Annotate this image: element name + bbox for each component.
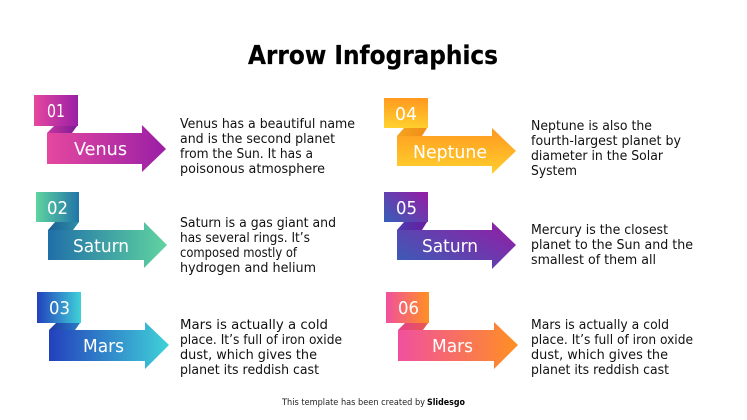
arrow: Mars — [398, 322, 518, 369]
number tab 04 — [384, 98, 428, 128]
number tab 01 — [34, 95, 78, 126]
fold 02 — [48, 222, 79, 230]
arrow: Venus — [47, 125, 166, 172]
footer credit: This template has been created by — [281, 398, 425, 408]
panel: 02 Saturn — [36, 192, 336, 276]
number tab 02 — [36, 192, 79, 222]
description: Venus: from the Sun. It has a — [180, 147, 313, 162]
number tab 01: 01 — [47, 102, 65, 122]
fold 06 — [398, 323, 428, 330]
description: Mars — [531, 318, 693, 378]
number tab 05: 05 — [396, 199, 417, 219]
arrow: Saturn: Saturn — [422, 237, 478, 257]
fold 04 — [397, 128, 427, 136]
description: Venus: and is the second planet — [180, 132, 335, 147]
arrow: Venus: Venus — [74, 140, 127, 160]
description: Mars: Mars is actually a cold — [531, 318, 669, 333]
panel: 06 Mars — [386, 292, 693, 378]
description: Mercury: Mercury is the closest — [531, 223, 668, 238]
number tab 06: 06 — [398, 299, 419, 319]
description: Saturn: composed mostly of — [180, 246, 297, 261]
number tab 03 — [37, 292, 81, 323]
description: Mars: dust, which gives the — [180, 348, 317, 363]
panel: 03 Mars — [37, 292, 342, 378]
description: Mars: planet its reddish cast — [531, 363, 669, 378]
arrow: Saturn — [397, 222, 516, 269]
title: Arrow Infographics — [248, 41, 498, 71]
arrow: Mars: Mars — [432, 337, 473, 357]
footer credit: Slidesgo — [427, 398, 465, 408]
fold 05 — [397, 222, 427, 230]
description: Venus — [180, 117, 355, 177]
description: Venus: poisonous atmosphere — [180, 162, 325, 177]
description: Neptune: Neptune is also the — [531, 119, 652, 134]
description: Mars: Mars is actually a cold — [180, 318, 328, 333]
description: Neptune: System — [531, 164, 577, 179]
description: Mars: place. It’s full of iron oxide — [531, 333, 693, 348]
number tab 04: 04 — [395, 105, 417, 125]
description: Mercury: planet to the Sun and the — [531, 238, 693, 253]
arrow: Neptune: Neptune — [413, 143, 487, 163]
description: Mercury: smallest of them all — [531, 253, 656, 268]
description: Venus: Venus has a beautiful name — [180, 117, 355, 132]
description: Saturn — [180, 216, 336, 276]
fold 01 — [47, 126, 77, 133]
description: Mars: planet its reddish cast — [180, 363, 319, 378]
description: Mars — [180, 318, 342, 378]
number tab 05 — [384, 192, 428, 222]
description: Saturn: hydrogen and helium — [180, 261, 316, 276]
fold 03 — [49, 323, 80, 330]
description: Saturn: has several rings. It’s — [180, 231, 310, 246]
description: Saturn: Saturn is a gas giant and — [180, 216, 336, 231]
description: Mars: place. It’s full of iron oxide — [180, 333, 342, 348]
arrow: Mars: Mars — [83, 337, 124, 357]
number tab 02: 02 — [47, 199, 68, 219]
panel: 05 Saturn — [384, 192, 693, 269]
description: Neptune: fourth-largest planet by — [531, 134, 681, 149]
arrow: Mars — [49, 322, 169, 369]
panel: 01 Venus — [34, 95, 355, 177]
description: Neptune — [531, 119, 681, 179]
arrow: Saturn: Saturn — [73, 237, 129, 257]
number tab 03: 03 — [49, 299, 70, 319]
arrow: Neptune — [397, 128, 516, 174]
number tab 06 — [386, 292, 429, 323]
panel: 04 Neptune — [384, 98, 681, 179]
description: Mars: dust, which gives the — [531, 348, 668, 363]
description: Neptune: diameter in the Solar — [531, 149, 664, 164]
arrow: Saturn — [48, 222, 167, 268]
description: Mercury — [531, 223, 693, 268]
